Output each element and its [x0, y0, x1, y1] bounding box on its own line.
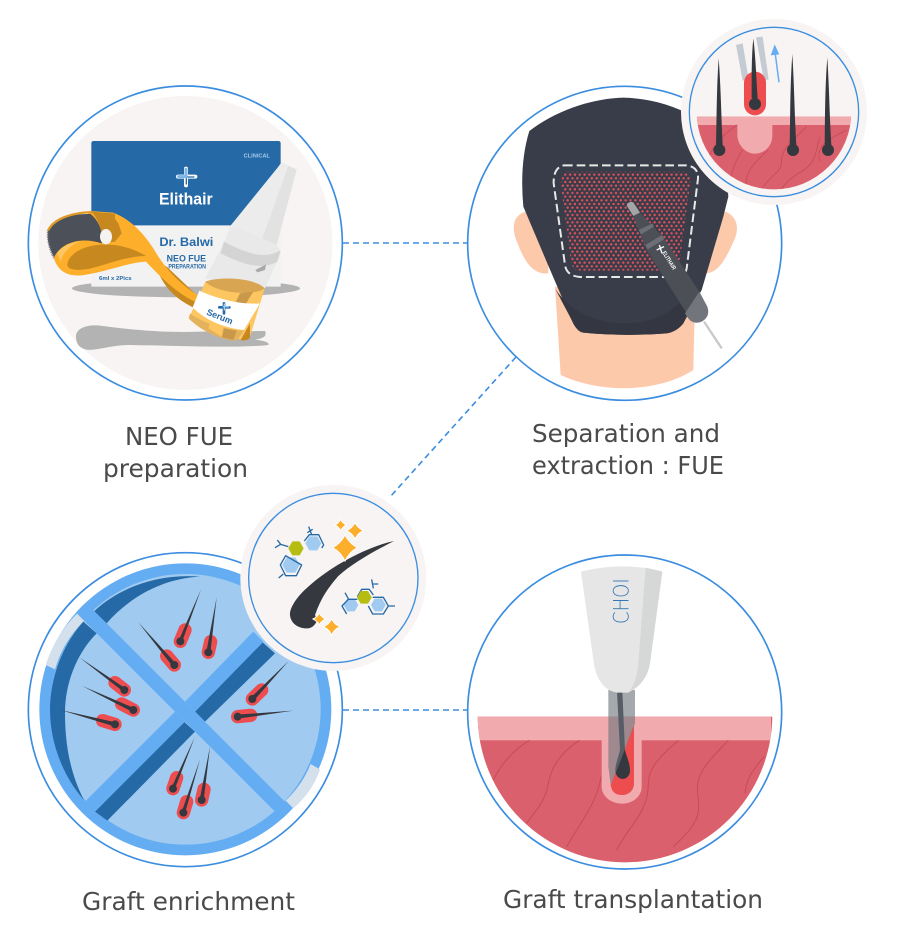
arrow up — [771, 44, 779, 82]
inset: enriched hair close-up — [240, 485, 426, 671]
sparkles — [313, 519, 363, 635]
extracted graft — [744, 38, 766, 115]
neck — [555, 287, 695, 388]
tweezers — [736, 43, 749, 81]
implanter needle — [608, 690, 635, 785]
shadow under roller — [76, 325, 269, 350]
label: NEO FUE preparation: preparation — [103, 454, 248, 483]
inset: extraction close-up — [681, 19, 867, 205]
connector: step 3 to step 4 — [343, 709, 467, 711]
implanter handpiece — [581, 566, 662, 693]
product box: PREPARATION — [168, 265, 206, 271]
skin cross-section — [473, 717, 777, 867]
label: graft enrichment: Graft enrichment — [82, 887, 295, 916]
petri dish — [39, 563, 331, 855]
product box: 6ml x 2Pics — [99, 276, 132, 282]
grafts — [103, 630, 262, 813]
roller drum — [48, 214, 102, 257]
molecule lower — [342, 579, 395, 614]
label: separation and extraction: Separation and — [532, 419, 720, 448]
roller — [48, 211, 199, 308]
connector: step 1 to step 2 — [343, 242, 467, 244]
panel: NEO FUE preparation — [28, 86, 342, 400]
label: separation and extraction — [532, 419, 724, 480]
ears — [514, 212, 737, 273]
handle swirl — [67, 244, 146, 270]
enriched hair — [290, 541, 394, 628]
product box — [91, 141, 281, 287]
panel: graft transplantation — [468, 555, 782, 869]
connector: step 2 to step 3 — [390, 357, 516, 497]
donor zone dots — [558, 168, 693, 273]
donor zone dashed outline — [554, 165, 698, 277]
label: separation and extraction: extraction : FUE — [532, 451, 724, 480]
label: NEO FUE preparation: NEO FUE — [125, 422, 233, 451]
implanter handpiece: CHOI — [609, 578, 634, 624]
extraction pen: ELITHAIR — [660, 251, 677, 272]
icon: cross logo — [178, 169, 195, 185]
hair on head — [522, 98, 728, 335]
product box: Elithair — [159, 190, 213, 208]
product box: CLINICAL — [244, 153, 271, 159]
graft hairs — [61, 589, 293, 817]
label: graft transplantation: Graft transplantation — [503, 885, 763, 914]
roller fork — [92, 212, 122, 243]
molecule upper — [275, 527, 324, 578]
shadow under box — [72, 279, 300, 297]
graft in needle — [615, 692, 630, 779]
product box: Dr. Balwi — [159, 235, 213, 249]
serum bottle: Serum — [205, 307, 234, 326]
serum bottle — [189, 278, 265, 341]
skin layers — [696, 116, 852, 190]
follicles — [713, 54, 834, 156]
bottle nozzle — [205, 163, 297, 288]
extraction pen — [627, 202, 722, 348]
panel: separation and extraction — [468, 19, 867, 400]
label: NEO FUE preparation — [103, 422, 248, 483]
product box: NEO FUE — [167, 254, 206, 264]
panel: graft enrichment — [28, 485, 426, 867]
